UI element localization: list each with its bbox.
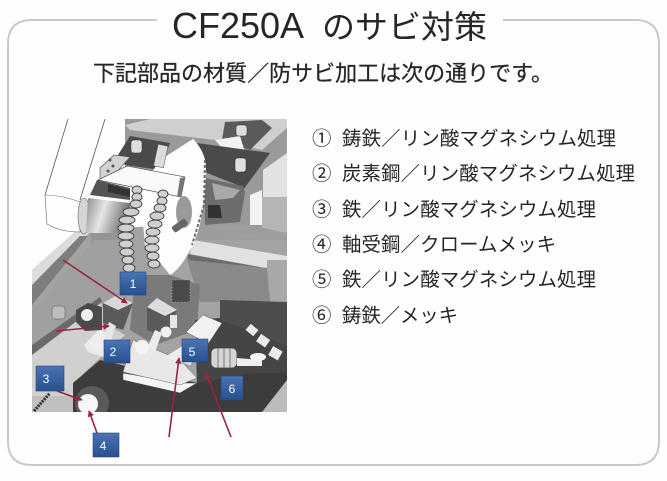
gray block behind chains	[90, 233, 122, 244]
left floor stripes	[32, 232, 89, 285]
number labels: 3	[43, 372, 50, 386]
clamp block 1	[103, 295, 133, 330]
title: CF250A	[172, 5, 304, 46]
parts list: 炭素鋼／リン酸マグネシウム処理	[342, 163, 635, 185]
right cylinder	[263, 153, 287, 197]
mid gray machine bed	[32, 226, 287, 383]
parts list: ④	[312, 234, 331, 256]
number labels: 2	[110, 345, 117, 359]
dark slot under band	[187, 254, 264, 268]
parts list: ②	[312, 163, 331, 185]
white disc	[140, 139, 206, 275]
number labels: 1	[130, 277, 137, 291]
subtitle: 下記部品の材質／防サビ加工は次の通りです。	[93, 61, 553, 86]
belt outline	[45, 119, 105, 200]
parts list: ③	[312, 199, 331, 221]
light floor band	[32, 303, 125, 396]
parts list: ⑤	[312, 269, 331, 291]
inner slot	[205, 178, 245, 225]
number labels	[36, 272, 243, 457]
parts list: ⑥	[312, 305, 331, 327]
top bracket strip	[125, 119, 287, 150]
upper right housing	[125, 119, 287, 240]
parts list: 鉄／リン酸マグネシウム処理	[342, 199, 596, 221]
bolts	[131, 140, 142, 153]
dark lower casing	[73, 360, 287, 412]
machine illustration	[32, 119, 287, 457]
parts list: 鉄／リン酸マグネシウム処理	[342, 269, 596, 291]
bearing	[75, 386, 109, 412]
bracket plates	[100, 155, 130, 182]
number labels: 4	[100, 439, 107, 453]
gray region under disc	[187, 260, 270, 302]
right dark area	[195, 318, 287, 383]
white top block	[98, 166, 185, 197]
white rail band	[190, 240, 287, 268]
parts list: 鋳鉄／リン酸マグネシウム処理	[342, 128, 616, 150]
cable chains	[118, 186, 168, 272]
number labels: 6	[229, 382, 236, 396]
knobs	[106, 322, 116, 338]
dark plate left	[118, 136, 170, 170]
gray shelf	[262, 228, 286, 233]
parts list: 鋳鉄／メッキ	[342, 305, 458, 327]
number labels: 5	[189, 345, 196, 359]
motor cylinder	[78, 198, 88, 234]
dark plate right	[197, 143, 270, 190]
pulley	[211, 348, 237, 368]
white table plates	[123, 373, 197, 393]
central gray area	[130, 275, 200, 345]
parts list	[312, 128, 635, 327]
rail bottom left	[32, 396, 74, 412]
left white base	[84, 330, 113, 357]
parts list: ①	[312, 128, 331, 150]
title: のサビ対策	[322, 9, 487, 45]
parts list: 軸受鋼／クロームメッキ	[342, 234, 556, 256]
arrows	[56, 260, 231, 437]
clamp block 2	[147, 307, 177, 332]
vertical right columns	[267, 260, 287, 305]
